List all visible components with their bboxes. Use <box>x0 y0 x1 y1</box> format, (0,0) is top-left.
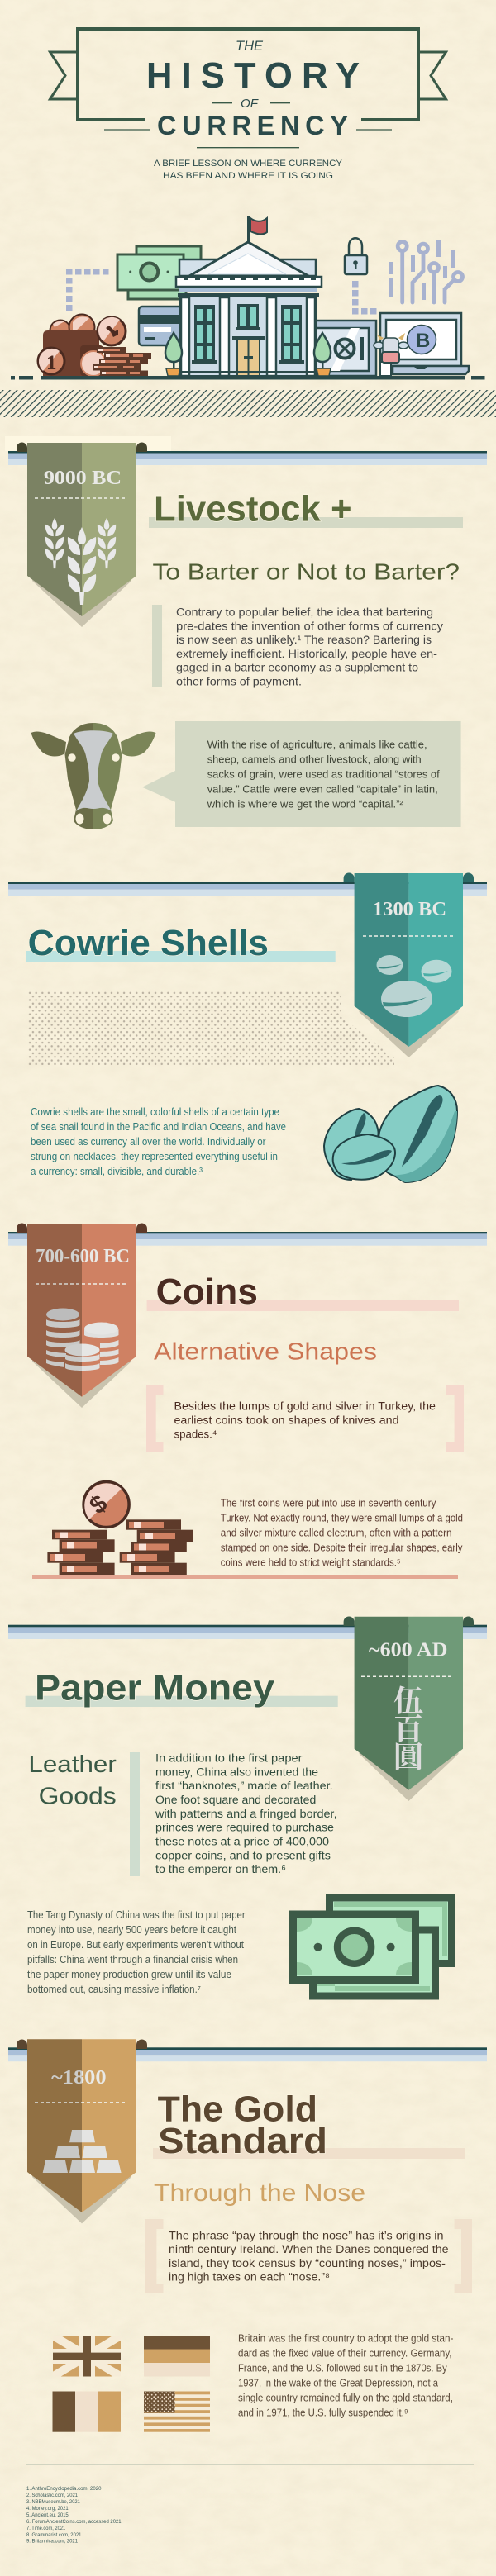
sources list: 5. Ancient.eu, 2015 <box>26 2512 69 2518</box>
leather notes paragraph: first “banknotes,” made of leather. <box>155 1780 333 1792</box>
coins paragraph: and silver mixture called electrum, often with a pattern <box>221 1527 451 1539</box>
subheading <box>28 1751 117 1809</box>
barter paragraph: pre-dates the invention of other forms of currency <box>176 620 443 632</box>
dotted connector right <box>352 281 377 314</box>
date ribbon: ~600 AD <box>369 1639 448 1661</box>
leather notes paragraph: these notes at a price of 400,000 <box>155 1835 329 1847</box>
coins paragraph: stamped on one side. Despite their irregular shapes, early <box>221 1542 463 1554</box>
callout: cattle as capital: sheep, camels and other livestock, along with <box>207 753 422 766</box>
chinese characters <box>393 1678 423 1776</box>
windows <box>192 304 304 364</box>
bracketed note <box>146 1385 464 1452</box>
sources list: 6. ForumAncientCoins.com, accessed 2021 <box>26 2519 122 2525</box>
sources list: 1. AnthroEncyclopedia.com, 2020 <box>26 2486 102 2492</box>
leather notes paragraph: to the emperor on them.⁶ <box>155 1863 286 1875</box>
subheading: Goods <box>39 1783 117 1809</box>
subheading: Alternative Shapes <box>154 1339 377 1366</box>
halftone dot panel <box>28 991 394 1065</box>
subheading: To Barter or Not to Barter? <box>152 559 460 585</box>
heading: Cowrie Shells <box>28 923 269 963</box>
bracketed note: spades.⁴ <box>174 1428 217 1440</box>
icon: cowrie shells <box>324 1086 457 1182</box>
title banner <box>50 29 446 181</box>
callout: cattle as capital <box>142 721 461 827</box>
bracketed note: The phrase “pay through the nose” has it’s origins in <box>169 2229 443 2241</box>
date ribbon: 1300 BC <box>373 899 446 920</box>
flag: france <box>53 2391 121 2432</box>
section: 600 AD paper money <box>8 1616 487 1996</box>
bracketed note: ing high taxes on each “nose.”⁸ <box>169 2271 330 2284</box>
callout: cattle as capital: sacks of grain, were used as traditional “stores of <box>207 768 440 781</box>
icon: vault safe <box>311 321 376 376</box>
icon: banknotes <box>117 246 201 299</box>
heading: Coins <box>156 1271 258 1312</box>
date ribbon: 9000 BC <box>44 468 122 489</box>
icon: cow head <box>31 723 155 829</box>
sources list: 3. NBBMuseum.be, 2021 <box>26 2499 80 2505</box>
date ribbon <box>344 872 474 1057</box>
barter paragraph <box>152 605 443 687</box>
subtitle: A BRIEF LESSON ON WHERE CURRENCY <box>154 159 343 169</box>
section: 700-600 BC coins <box>8 1224 487 1579</box>
title text: THE <box>236 38 264 54</box>
cowrie paragraph: of sea snail found in the Pacific and Indian Oceans, and have <box>31 1120 286 1133</box>
gold standard paragraph: Britain was the first country to adopt the gold stan- <box>238 2331 453 2344</box>
header rule <box>5 436 487 465</box>
tang dynasty paragraph: on in Europe. But early experiments weren’t without <box>27 1938 244 1951</box>
icon: circuit lines <box>389 240 463 302</box>
leather notes paragraph: copper coins, and to present gifts <box>155 1849 331 1861</box>
bracketed note: ninth century Ireland. When the Danes conquered the <box>169 2243 449 2255</box>
title text: OF <box>241 97 259 111</box>
barter paragraph: is now seen as unlikely.¹ The reason? Bartering is <box>176 634 432 646</box>
heading <box>147 1271 459 1312</box>
ground line <box>11 376 484 380</box>
bracketed note <box>145 2219 472 2293</box>
flag: united kingdom <box>53 2336 121 2376</box>
header rule <box>8 1232 487 1246</box>
steps <box>180 371 316 373</box>
icon: small cow <box>374 333 408 376</box>
date ribbon: ~1800 <box>51 2067 107 2089</box>
section: 1300 BC cowrie shells <box>8 872 487 1182</box>
barter paragraph: Contrary to popular belief, the idea that bartering <box>176 606 433 619</box>
barter paragraph: gaged in a barter economy as a supplement to <box>176 662 418 674</box>
section: 9000 BC livestock <box>5 436 487 829</box>
tang dynasty paragraph: the paper money production grew until its value <box>27 1968 231 1980</box>
icon: laptop with bitcoin <box>380 313 469 374</box>
date ribbon <box>344 1616 474 1801</box>
heading: The Gold <box>158 2089 317 2129</box>
tang dynasty paragraph <box>27 1908 246 1995</box>
section: 1800 gold standard <box>8 2039 487 2432</box>
sources list: 4. Money.org, 2021 <box>26 2506 69 2512</box>
title text: CURRENCY <box>157 111 348 140</box>
sources list: 9. Britannica.com, 2021 <box>26 2538 78 2545</box>
icon: wheat <box>45 518 116 605</box>
gold standard paragraph: dard as the fixed value of their currency. Germany, <box>238 2346 451 2359</box>
subheading: Through the Nose <box>154 2179 365 2207</box>
hero illustration: bank and forms of currency <box>11 216 484 380</box>
icon: silver coin stacks <box>46 1309 119 1371</box>
dotted connector left <box>66 269 109 311</box>
barter paragraph: other forms of payment. <box>176 675 302 687</box>
coins paragraph: The first coins were put into use in seventh century <box>221 1497 436 1509</box>
header rule <box>8 882 487 896</box>
icon: potted trees <box>165 333 331 376</box>
subtitle <box>154 159 343 181</box>
heading: Standard <box>158 2121 327 2161</box>
flags of gold standard countries <box>53 2336 210 2432</box>
header rule <box>8 1625 487 1639</box>
heading: Livestock + <box>154 489 352 530</box>
tang dynasty paragraph: bottomed out, causing massive inflation.⁷ <box>27 1983 201 1995</box>
icon: banknote stack <box>293 1898 451 1996</box>
icon: gold bars <box>43 2130 122 2173</box>
heading <box>153 2089 465 2161</box>
icon: coin stack <box>93 347 151 376</box>
icon: wallet and coins <box>38 314 126 376</box>
callout: cattle as capital: value.” Cattle were even called “capitale” in latin, <box>207 783 438 796</box>
sources list <box>26 2486 122 2545</box>
columns <box>181 297 315 376</box>
coins paragraph <box>221 1497 463 1569</box>
title text: HISTORY <box>146 56 360 96</box>
leather notes paragraph: princes were required to purchase <box>155 1822 334 1834</box>
icon: coin and stacks <box>32 1482 458 1579</box>
cornice <box>176 277 322 287</box>
bitcoin coin: B <box>416 330 430 352</box>
cowrie paragraph: been used as currency all over the world. Individually or <box>31 1135 266 1148</box>
subtitle: HAS BEEN AND WHERE IT IS GOING <box>163 171 333 181</box>
bracketed note: Besides the lumps of gold and silver in Turkey, the <box>174 1400 436 1413</box>
chinese characters: 伍 <box>393 1678 423 1720</box>
bracketed note: earliest coins took on shapes of knives and <box>174 1414 398 1426</box>
chinese characters: 圓 <box>393 1734 423 1776</box>
tang dynasty paragraph: money into use, nearly 500 years before it caught <box>27 1923 236 1936</box>
date ribbon <box>17 1224 147 1408</box>
flag: united states <box>144 2391 210 2432</box>
title text <box>146 38 360 140</box>
cowrie paragraph: strung on necklaces, they represented everything useful in <box>31 1150 278 1162</box>
cowrie paragraph: a currency: small, divisible, and durable.³ <box>31 1165 203 1177</box>
door <box>232 336 265 376</box>
cowrie paragraph <box>31 1105 286 1177</box>
gold standard paragraph: and in 1971, the U.S. fully suspended it.⁹ <box>238 2406 408 2419</box>
icon: ribbon cowries <box>377 955 451 1017</box>
flag <box>247 216 267 244</box>
sources list: 8. Grammarist.com, 2021 <box>26 2532 82 2538</box>
date ribbon <box>17 443 147 627</box>
header rule <box>8 2047 487 2061</box>
gold standard paragraph: single country remained fully on the gold standard, <box>238 2391 453 2404</box>
callout: cattle as capital: which is where we get the word “capital.”² <box>207 798 403 810</box>
gold standard paragraph <box>238 2331 453 2419</box>
date ribbon <box>17 2039 147 2223</box>
barter paragraph: extremely inefficient. Historically, people have en- <box>176 648 437 660</box>
leather notes paragraph: One foot square and decorated <box>155 1794 316 1806</box>
icon: padlock <box>345 238 367 274</box>
flag: germany <box>144 2336 210 2376</box>
building body <box>180 296 316 376</box>
roof <box>179 259 316 276</box>
banner ribbon ends <box>50 52 446 99</box>
gold standard paragraph: France, and the U.S. followed suit in the 1870s. By <box>238 2361 447 2374</box>
icon: bank building <box>176 216 322 376</box>
date ribbon: 700-600 BC <box>36 1246 130 1267</box>
heading <box>149 489 463 530</box>
bracketed note: island, they took census by “counting noses,” impos- <box>169 2257 446 2269</box>
sources list: 7. Time.com, 2021 <box>26 2526 65 2531</box>
icon: coin and stacks: $ <box>84 1490 113 1519</box>
gold standard paragraph: 1937, in the wake of the Great Depression, not a <box>238 2376 439 2389</box>
tang dynasty paragraph: The Tang Dynasty of China was the first to put paper <box>27 1908 246 1921</box>
icon: wallet and coins: 1 <box>46 352 56 374</box>
leather notes paragraph <box>130 1752 337 1876</box>
leather notes paragraph: money, China also invented the <box>155 1766 318 1778</box>
subheading: Leather <box>28 1751 117 1778</box>
heading: Paper Money <box>35 1667 275 1708</box>
sources list: 2. Scholastic.com, 2021 <box>26 2493 78 2498</box>
chinese characters: 百 <box>393 1706 423 1748</box>
tang dynasty paragraph: pitfalls: China went through a financial crisis when <box>27 1953 238 1965</box>
cowrie paragraph: Cowrie shells are the small, colorful shells of a certain type <box>31 1105 279 1118</box>
coins paragraph: coins were held to strict weight standards.⁵ <box>221 1557 401 1569</box>
leather notes paragraph: In addition to the first paper <box>155 1752 303 1765</box>
coins paragraph: Turkey. Not exactly round, they were small lumps of a gold <box>221 1512 463 1524</box>
banner frame <box>78 29 418 120</box>
icon: credit card <box>139 307 185 345</box>
callout: cattle as capital: With the rise of agriculture, animals like cattle, <box>207 739 427 751</box>
leather notes paragraph: with patterns and a fringed border, <box>155 1808 337 1820</box>
